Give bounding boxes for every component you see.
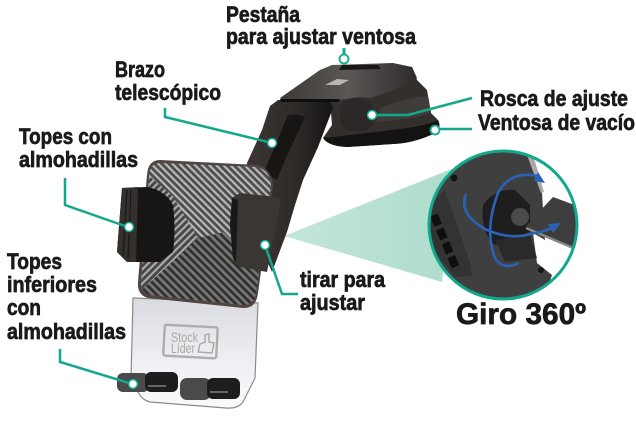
holder plate xyxy=(138,160,273,308)
leader: topes xyxy=(65,178,134,232)
label: topes con: almohadillas xyxy=(19,147,138,172)
label: giro: Giro 360º xyxy=(456,298,586,331)
leader: topes inferiores xyxy=(60,349,138,388)
teal projection cone xyxy=(284,168,454,282)
icon: thumb xyxy=(198,334,214,353)
label: topes con: Topes con xyxy=(19,124,112,149)
left grip xyxy=(117,187,174,262)
blue rotation arrows xyxy=(464,175,556,266)
label: topes inferiores: con xyxy=(7,295,41,320)
adjustment tab xyxy=(339,65,381,70)
logo: Stock Lider xyxy=(163,325,218,358)
leader: rosca xyxy=(368,98,472,120)
transparent phone back xyxy=(131,298,258,408)
telescopic arm xyxy=(240,100,333,272)
label: brazo: telescópico xyxy=(115,80,221,105)
label: pestaña: Pestaña xyxy=(226,2,300,27)
logo: Stock Lider: Líder xyxy=(171,340,195,356)
lower left grip xyxy=(117,372,178,392)
label: topes inferiores: inferiores xyxy=(7,272,97,297)
label: tirar: ajustar xyxy=(300,290,365,315)
label: tirar: tirar para xyxy=(300,267,385,292)
label: topes inferiores: almohadillas xyxy=(7,319,126,344)
lower right grip xyxy=(180,378,240,400)
detail circle: 360 rotation xyxy=(428,150,578,300)
label: topes inferiores: Topes xyxy=(7,249,62,274)
leader: pestaña xyxy=(340,48,348,64)
leader: tirar xyxy=(260,240,298,294)
logo: Stock Lider: Stock xyxy=(171,329,199,345)
leader: ventosa xyxy=(430,126,472,134)
right grip xyxy=(230,193,280,272)
label: pestaña: para ajustar ventosa xyxy=(226,24,416,49)
adjustment knob xyxy=(340,98,374,131)
mount black band xyxy=(280,99,340,102)
mount shine xyxy=(325,79,349,85)
label: brazo: Brazo xyxy=(115,57,165,82)
suction base xyxy=(323,67,439,147)
arm mount top xyxy=(280,63,417,100)
leader: brazo xyxy=(165,108,276,148)
